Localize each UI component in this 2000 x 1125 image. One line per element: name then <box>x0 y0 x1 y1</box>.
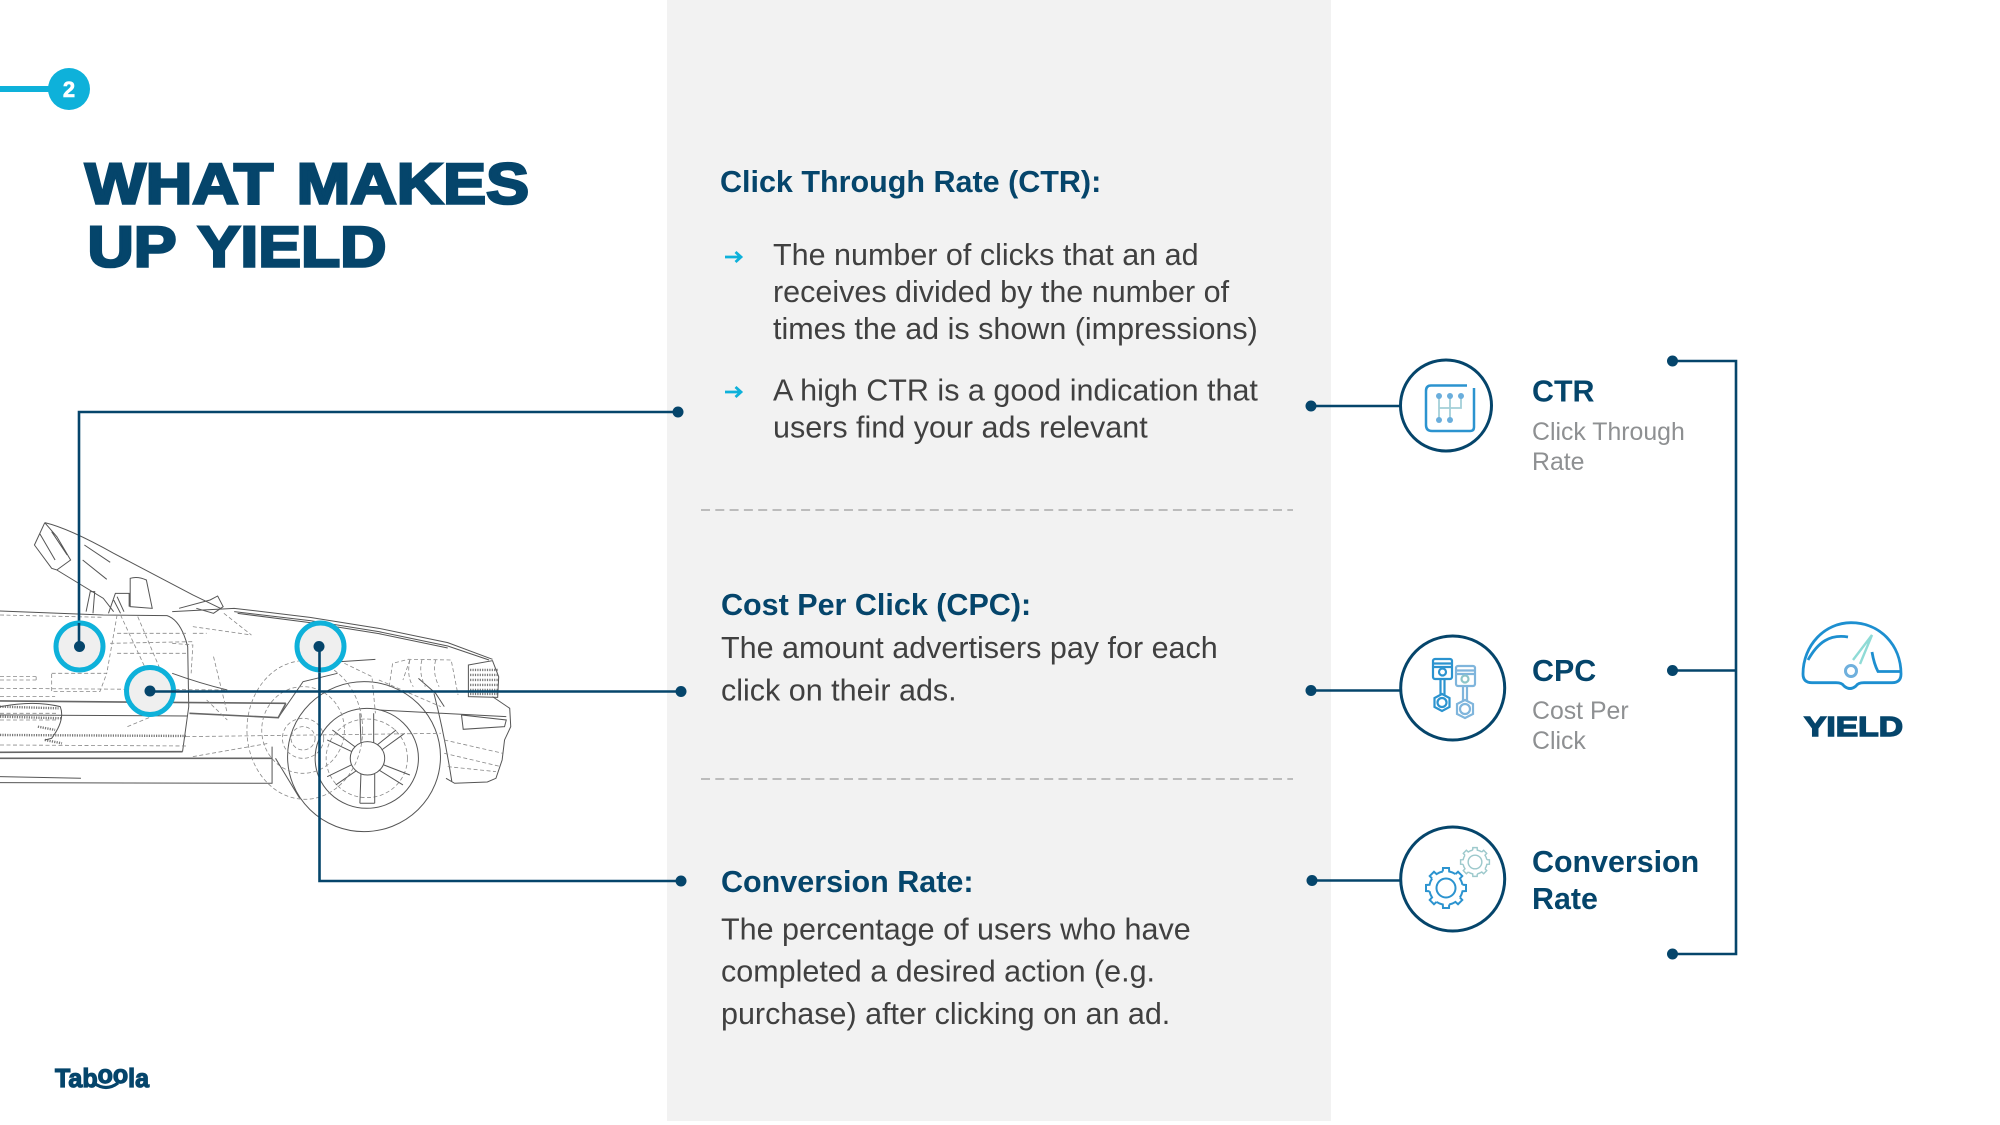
label: CPC: Cost Per <box>1532 698 1629 725</box>
connector: wheel point to conversion text <box>320 647 686 886</box>
text block: CTR bullet 2 <box>773 374 1258 444</box>
icon: speedometer <box>1803 623 1901 688</box>
icon: pistons <box>1401 636 1505 740</box>
label: CTR: Rate <box>1532 449 1584 476</box>
label: CTR: CTR <box>1532 374 1595 408</box>
text block: CTR bullet 1: times the ad is shown (impressions) <box>773 312 1258 346</box>
connector: door point to CPC text <box>150 686 686 697</box>
title: UP YIELD <box>88 216 386 280</box>
text block: conversion rate: Conversion Rate: <box>721 865 974 899</box>
title <box>85 152 529 280</box>
logo: Taboola: Tab <box>55 1063 99 1093</box>
car: rear ghost wheel <box>247 661 363 799</box>
icon: gears <box>1401 827 1505 931</box>
bullet arrow 2 <box>725 387 741 397</box>
text block: CTR bullet 1: receives divided by the number of <box>773 275 1230 309</box>
text block: CTR bullet 1 <box>773 238 1258 346</box>
title: WHAT MAKES <box>85 152 529 216</box>
text block: CPC: click on their ads. <box>721 674 957 708</box>
car: seats and mirror <box>86 577 223 613</box>
label: CPC: Click <box>1532 728 1586 755</box>
bullet arrow 1 <box>725 252 741 262</box>
label: CPC <box>1532 654 1629 755</box>
panel: central grey column <box>667 0 1331 1121</box>
car: interior dashed construction lines <box>0 613 503 772</box>
text block: conversion rate: purchase) after clicking on an ad. <box>721 997 1170 1031</box>
label: conversion rate <box>1532 845 1699 916</box>
text block: CPC: The amount advertisers pay for each <box>721 631 1218 665</box>
icon: gear shift <box>1400 360 1492 451</box>
car wireframe illustration <box>0 523 511 832</box>
connector: top car point to CTR text <box>79 406 684 647</box>
connector: conversion text to icon <box>1306 875 1401 886</box>
label: CTR: Click Through <box>1532 419 1685 446</box>
section number badge: 2 <box>63 77 75 102</box>
text block: CPC: Cost Per Click (CPC): <box>721 588 1031 622</box>
logo: Taboola <box>55 1059 150 1093</box>
text block: conversion rate: The percentage of users who have <box>721 912 1191 946</box>
label: YIELD: YIELD <box>1804 711 1903 742</box>
text block: CTR heading: Click Through Rate (CTR): <box>720 165 1101 199</box>
label: conversion rate: Rate <box>1532 882 1598 916</box>
label: conversion rate: Conversion <box>1532 845 1699 879</box>
text block: conversion rate: completed a desired action (e.g. <box>721 954 1155 988</box>
text block: CTR bullet 2: A high CTR is a good indication that <box>773 374 1258 408</box>
connector: CPC text to CPC icon <box>1306 685 1401 696</box>
logo: Taboola: oo <box>98 1059 128 1089</box>
bracket joining metrics to yield <box>1667 356 1736 960</box>
car hotspot: top <box>56 623 103 670</box>
car: front wheel and rim <box>288 682 440 832</box>
car hotspot: door <box>126 668 176 714</box>
text block: CTR bullet 1: The number of clicks that an ad <box>773 238 1199 272</box>
car: bumper and fender <box>379 678 511 783</box>
car: heavy sill lines <box>0 701 286 758</box>
car: grille <box>468 661 499 697</box>
text block: conversion rate <box>721 865 1191 1031</box>
connector: CTR text to CTR icon <box>1306 400 1401 412</box>
text block: CTR bullet 2: users find your ads relevant <box>773 410 1148 444</box>
section number badge <box>0 68 90 110</box>
logo: Taboola: la <box>128 1063 150 1093</box>
label: CTR <box>1532 374 1685 476</box>
text block: CPC <box>721 588 1218 708</box>
car: body, door and hood outline <box>0 608 492 783</box>
label: CPC: CPC <box>1532 654 1596 688</box>
car hotspot: wheel <box>297 623 344 672</box>
car: headlight <box>389 659 458 695</box>
car: windshield and folded top <box>34 523 220 612</box>
